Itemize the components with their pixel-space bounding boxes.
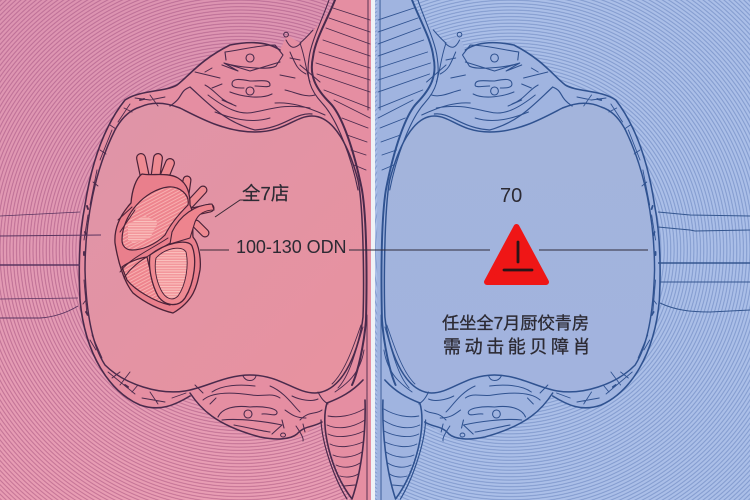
heart vessels outline bbox=[141, 158, 170, 182]
heart side vessels fill bbox=[185, 180, 210, 233]
connector line: warning to right bbox=[539, 249, 648, 251]
panel: right cavity bbox=[384, 103, 655, 393]
heart vessels side outline bbox=[185, 180, 210, 233]
right anatomy line drawing bbox=[378, 0, 660, 500]
leader line: heart to label bbox=[215, 200, 248, 217]
lower right chamber bbox=[149, 242, 195, 305]
panel: left anatomy silhouette bbox=[79, 0, 371, 500]
lower right chamber inner bbox=[155, 248, 187, 299]
label: heart top: 全7店 bbox=[242, 183, 289, 204]
upper chamber bbox=[122, 187, 188, 250]
panel: right blue hatch background bbox=[375, 0, 750, 500]
panel: left pink hatch background bbox=[0, 0, 371, 500]
label: right value: 70 bbox=[500, 185, 522, 207]
heart vessels fill bbox=[141, 158, 170, 182]
text block: warning note bbox=[442, 313, 594, 357]
note line 1: 任坐全7月厨佼青房 bbox=[442, 313, 589, 333]
label: range value: 100-130 ODN bbox=[236, 237, 347, 257]
icon: warning triangle bbox=[487, 227, 546, 282]
great vessel band bbox=[170, 204, 214, 244]
panel: left cavity bbox=[85, 103, 363, 393]
icon: heart illustration bbox=[115, 158, 214, 313]
leader line: heart to range value bbox=[200, 249, 229, 251]
heart body bbox=[115, 174, 200, 313]
centre divider bbox=[371, 0, 375, 500]
left anatomy line drawing bbox=[79, 0, 370, 500]
panel: right anatomy silhouette bbox=[377, 0, 660, 500]
connector line: left to warning bbox=[349, 249, 490, 251]
lower left chamber bbox=[122, 257, 170, 305]
heart septum lines bbox=[118, 207, 170, 278]
note line 2: 需动击能贝障肖 bbox=[443, 337, 594, 357]
right side tendon lines bbox=[658, 212, 750, 312]
upper chamber highlight bbox=[128, 216, 158, 243]
left side tendon lines bbox=[0, 212, 101, 318]
panel: left hatch tint bbox=[0, 0, 371, 500]
